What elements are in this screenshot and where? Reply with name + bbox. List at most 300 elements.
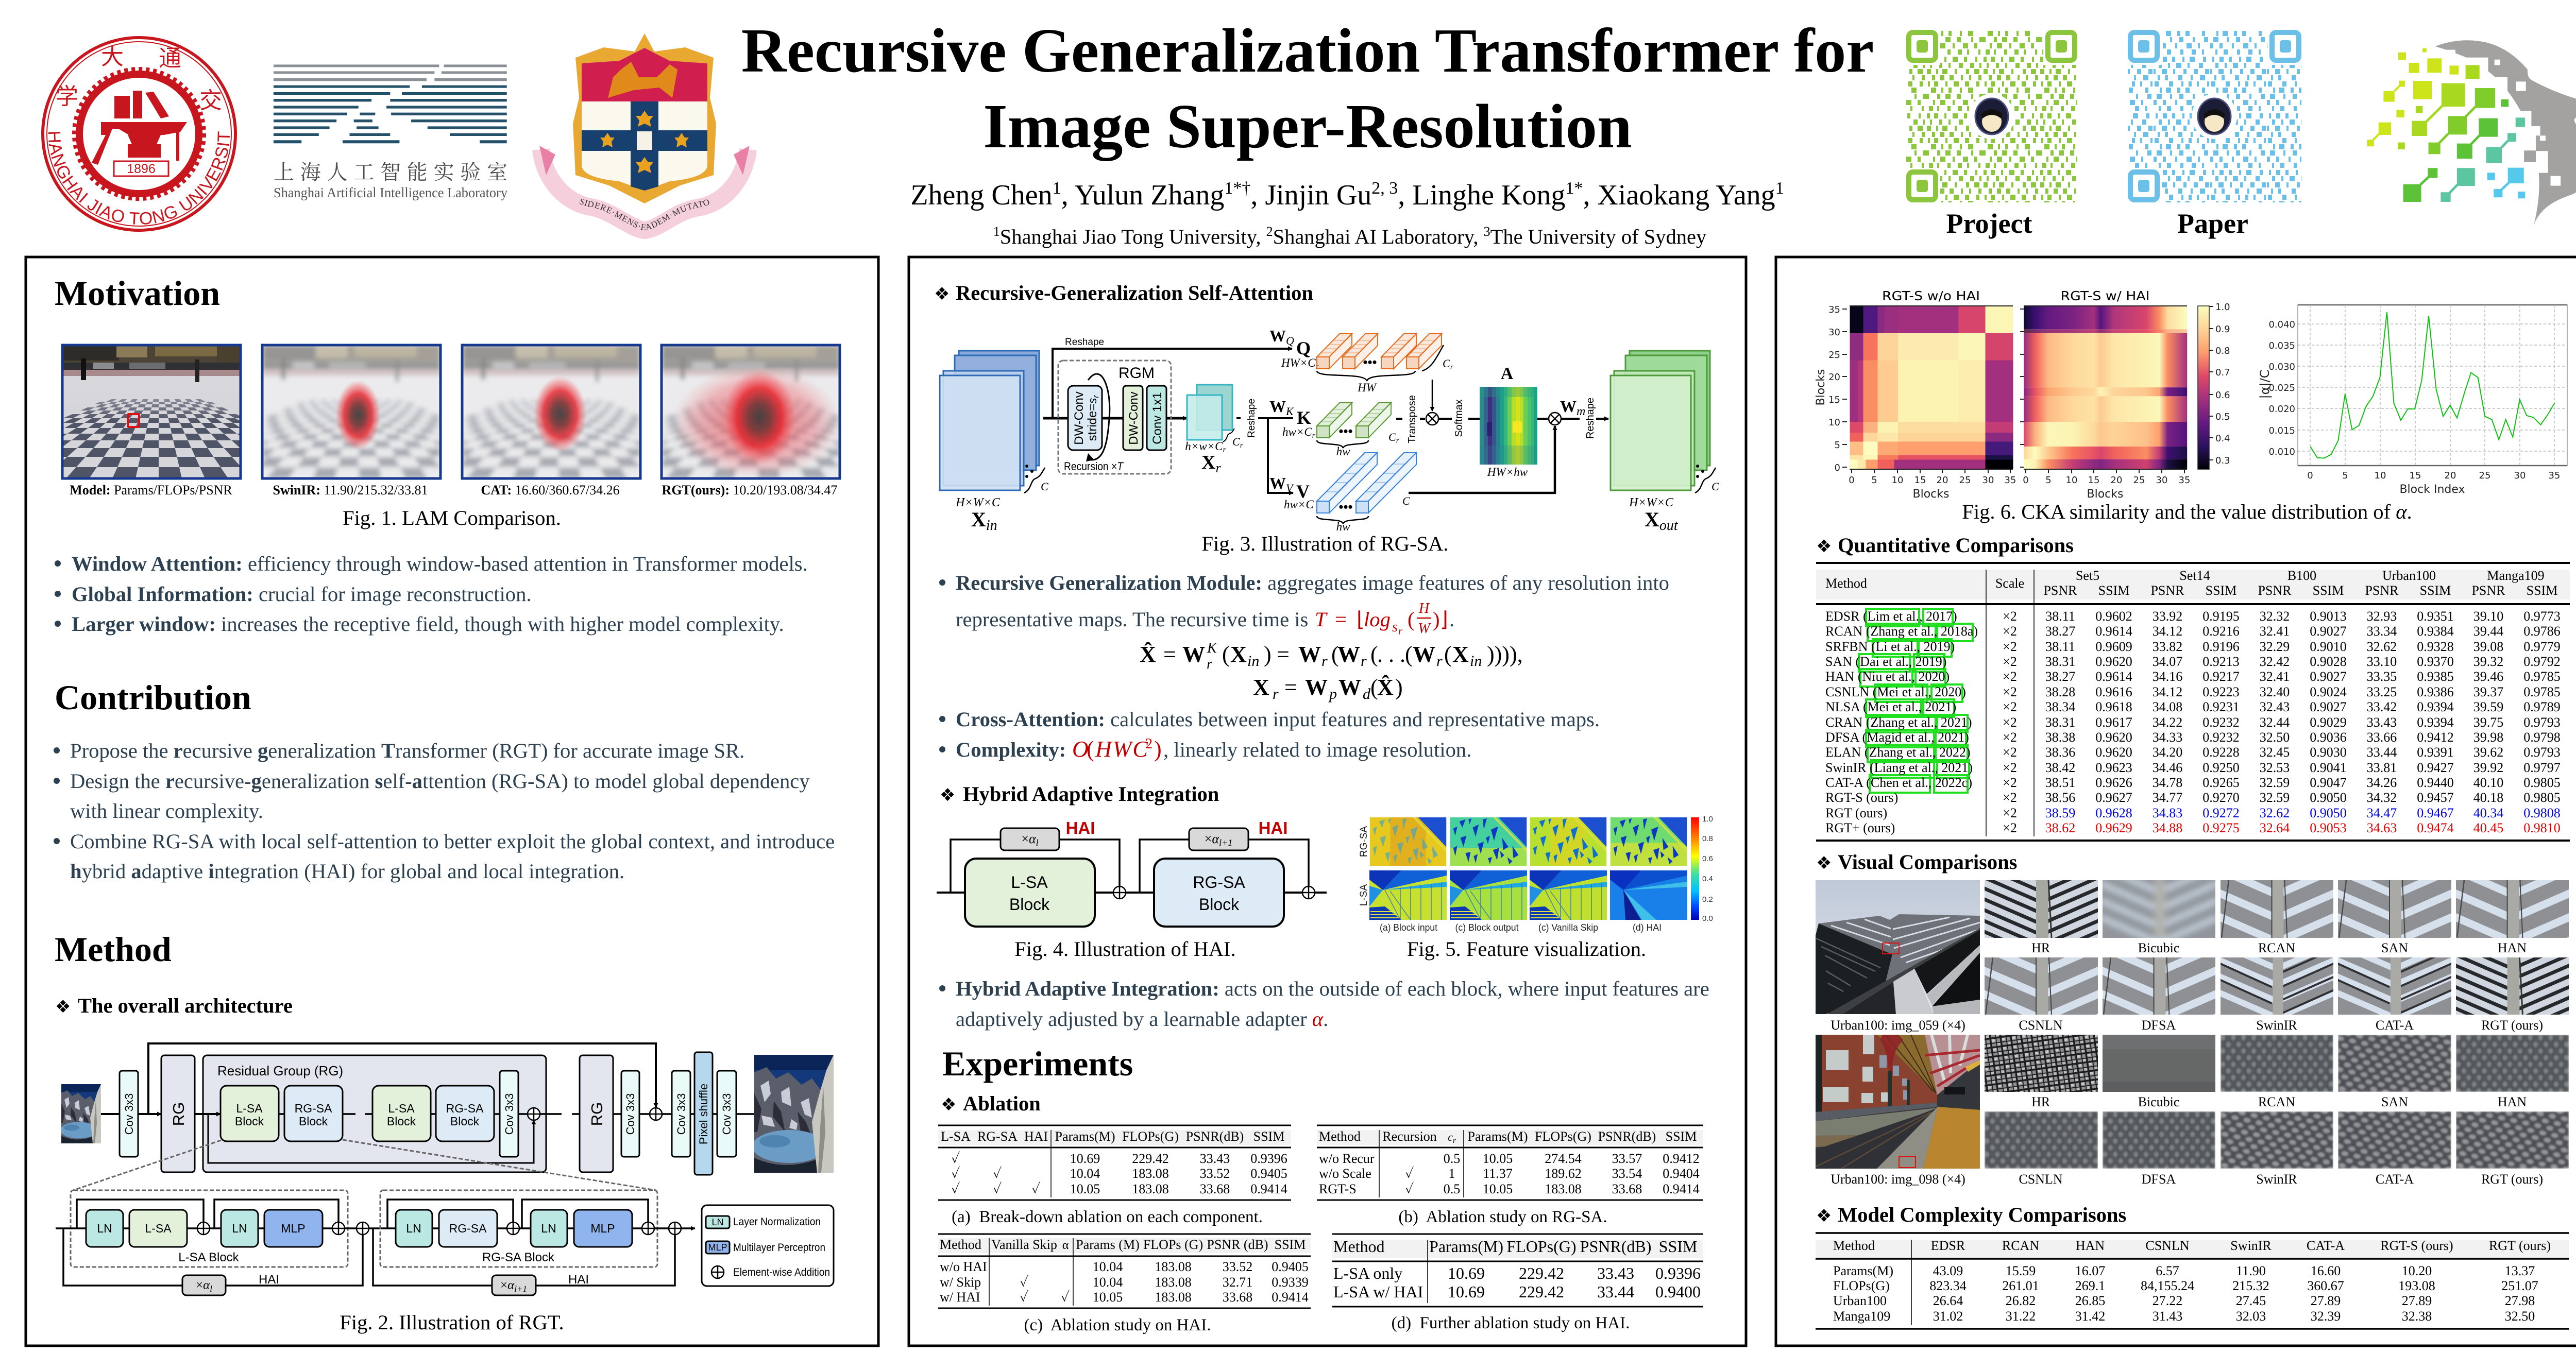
table: (a) break-down ablation: 33.43 <box>1200 1151 1230 1166</box>
table: quantitative comparisons: 0.9195 <box>2202 609 2240 624</box>
table: model complexity: FLOPs(G) <box>1833 1278 1890 1293</box>
equation 2: p <box>1328 686 1337 703</box>
table: quantitative comparisons: 33.10 <box>2367 654 2397 669</box>
affiliations: 2 <box>1266 224 1273 239</box>
RGM module: stride=s <box>1086 398 1099 441</box>
image captions: SwinIR: 11.90/215.32/33.81 <box>273 483 428 498</box>
table: model complexity: EDSR <box>1931 1238 1965 1253</box>
table: quantitative comparisons: 38.51 <box>2045 775 2075 790</box>
chart: CKA heatmap without HAI: Blocks <box>1913 488 1949 501</box>
table: quantitative comparisons: 38.31 <box>2045 654 2075 669</box>
image: RGT LAM <box>526 345 967 479</box>
arrows: main path <box>1043 417 1187 419</box>
K branch: C <box>1388 431 1396 443</box>
figure: feature visualization: 0.2 <box>1702 895 1713 904</box>
K branch: r <box>1312 432 1315 440</box>
connector between groups <box>540 1113 754 1115</box>
table: quantitative comparisons: 32.40 <box>2260 684 2290 699</box>
subheading: Quantitative Comparisons: Quantitative Comparisons <box>1838 534 2074 557</box>
equation 1: X <box>1452 642 1469 667</box>
table: quantitative comparisons: 39.59 <box>2473 699 2503 714</box>
table: model complexity: 31.42 <box>2075 1309 2105 1324</box>
block: Cov 3x3 <box>717 1071 736 1157</box>
bullet: complexity <box>956 736 1471 762</box>
equation 1: K <box>1207 640 1217 656</box>
table: quantitative comparisons: 0.9773 <box>2523 609 2561 624</box>
V branch: V <box>1296 481 1310 502</box>
table: (b) RG-SA ablation: PSNR(dB) <box>1598 1129 1656 1144</box>
detail: RG-SA block <box>380 1190 695 1267</box>
table: (d) further HAI ablation: 10.69 <box>1448 1264 1485 1282</box>
table: quantitative comparisons: 39.75 <box>2473 715 2503 730</box>
table: quantitative comparisons: 34.77 <box>2153 790 2182 805</box>
K branch <box>1269 397 1399 458</box>
table: (b) RG-SA ablation: 183.08 <box>1545 1181 1582 1196</box>
Q branch: Q <box>1296 338 1311 358</box>
table: quantitative comparisons: 32.41 <box>2260 669 2290 684</box>
table: quantitative comparisons: 32.62 <box>2260 806 2290 820</box>
table: quantitative comparisons: 38.62 <box>2045 820 2075 835</box>
table: (d) further HAI ablation: SSIM <box>1659 1237 1697 1256</box>
representative features <box>1185 385 1243 475</box>
subheading: Visual Comparisons: ❖ <box>1816 853 1832 874</box>
figure: feature visualization: 0.6 <box>1702 854 1713 863</box>
panel: right column <box>1776 257 2576 1346</box>
block: RG 2: RG <box>588 1102 606 1126</box>
block: pixel shuffle <box>694 1052 713 1175</box>
table: quantitative comparisons: 0.9616 <box>2095 684 2132 699</box>
table: (a) break-down ablation: L-SA <box>941 1129 971 1144</box>
caption: Fig. 1: Fig. 1. LAM Comparison. <box>343 506 561 529</box>
chart: alpha value line chart <box>2258 305 2567 496</box>
table: quantitative comparisons: EDSR (Lim et al., 2017) <box>1825 609 1957 624</box>
chart: CKA heatmap with HAI: 10 <box>2066 475 2077 486</box>
bullets: RG module: ) <box>1433 608 1440 631</box>
heading: Method: Method <box>55 930 172 969</box>
crop labels row 2: SwinIR <box>2256 1018 2297 1033</box>
table: (a) break-down ablation: 0.9414 <box>1250 1181 1287 1196</box>
table: quantitative comparisons: NLSA (Mei et al., 2021) <box>1825 699 1956 714</box>
block: Cov 3x3 <box>120 1071 138 1157</box>
table: quantitative comparisons: 0.9351 <box>2417 609 2454 624</box>
bullet: complexity: , linearly related to image resolution. <box>1163 738 1471 761</box>
table: quantitative comparisons: 0.9440 <box>2417 775 2454 790</box>
table: quantitative comparisons: 32.44 <box>2260 715 2290 730</box>
table: quantitative comparisons: 0.9231 <box>2202 699 2240 714</box>
figure: feature visualization: (d) HAI <box>1633 922 1662 933</box>
HAI skip paths: ×α <box>500 1278 514 1292</box>
image: SwinIR LAM <box>127 345 567 478</box>
chart: CKA heatmap with HAI <box>2020 288 2190 501</box>
diagram: HAI: ×α <box>1205 831 1219 846</box>
table: quantitative comparisons: ×2 <box>2003 820 2017 835</box>
equation 1: r <box>1207 656 1212 672</box>
table: quantitative comparisons: RGT+ (ours) <box>1825 820 1895 835</box>
table: (a) break-down ablation: Params(M) <box>1055 1129 1115 1144</box>
table: quantitative comparisons: 39.44 <box>2473 624 2503 639</box>
table: quantitative comparisons: 0.9027 <box>2310 699 2347 714</box>
figure: feature visualization <box>1359 815 1713 933</box>
crop labels row 1: HR <box>2031 940 2050 955</box>
table: quantitative comparisons: SwinIR (Liang et al., 2021) <box>1825 760 1973 775</box>
transpose and softmax labels: Reshape <box>1585 398 1596 439</box>
Q branch: Q <box>1286 334 1294 347</box>
label: W_m: m <box>1577 405 1585 418</box>
table: model complexity: 84,155.24 <box>2141 1278 2194 1293</box>
authors: , Yulun Zhang <box>1061 179 1224 211</box>
motivation bullets <box>55 552 808 636</box>
chart: alpha value line chart: 15 <box>2410 470 2421 481</box>
table: model complexity: 10.20 <box>2402 1263 2432 1278</box>
table: (a) break-down ablation: 33.52 <box>1200 1166 1230 1181</box>
output feature stack: H×W×C <box>1629 496 1674 509</box>
output feature stack: X <box>1645 508 1659 531</box>
table: (b) RG-SA ablation: SSIM <box>1666 1129 1697 1144</box>
chart: CKA heatmap with HAI: 30 <box>2156 475 2167 486</box>
diagram: HAI: RG-SA <box>1193 873 1245 892</box>
table: (d) further HAI ablation: Params(M) <box>1429 1237 1503 1256</box>
table: quantitative comparisons: SAN (Dai et al., 2019) <box>1825 654 1946 669</box>
authors: 1 <box>1053 179 1061 198</box>
table: (b) RG-SA ablation: 33.57 <box>1612 1151 1642 1166</box>
bullets: RG module: s <box>1392 619 1398 635</box>
authors: 1* <box>1565 179 1583 198</box>
table: model complexity: 32.39 <box>2311 1309 2341 1324</box>
flow lines <box>1053 349 1292 418</box>
equation 1: ( <box>1370 642 1378 667</box>
subheading: Quantitative Comparisons: ❖ <box>1816 536 1832 557</box>
bullets: RG module: T <box>1315 608 1328 631</box>
crop labels row 1: HAN <box>2498 940 2527 955</box>
attention map A <box>1480 364 1537 478</box>
transpose and softmax labels: Transpose <box>1406 395 1418 443</box>
chart: CKA heatmap without HAI: 25 <box>1959 475 1971 486</box>
legend: Multilayer Perceptron <box>733 1242 825 1254</box>
diagram: RG-SA <box>940 327 1719 534</box>
equation 2: r <box>1273 686 1279 703</box>
table: model complexity: 13.37 <box>2505 1263 2535 1278</box>
Q branch <box>1269 327 1453 394</box>
table: quantitative comparisons: 38.38 <box>2045 730 2075 745</box>
table: quantitative comparisons: 34.08 <box>2153 699 2182 714</box>
detail: RG-SA block: MLP <box>590 1222 615 1235</box>
table: (c) HAI ablation: SSIM <box>1275 1237 1306 1252</box>
table: model complexity: 27.89 <box>2402 1293 2432 1308</box>
bullet: complexity: ( <box>1087 737 1094 762</box>
table: quantitative comparisons: 0.9036 <box>2310 730 2347 745</box>
chart: alpha value line chart: 5 <box>2342 470 2348 481</box>
table: quantitative comparisons: 34.16 <box>2153 669 2182 684</box>
table: quantitative comparisons: 32.50 <box>2260 730 2290 745</box>
attention map A: HW×hw <box>1487 466 1528 478</box>
subheading: HAI: ❖ <box>940 785 955 806</box>
QR label: Project: Project <box>1946 208 2032 239</box>
table: (d) further HAI ablation: 33.44 <box>1597 1282 1634 1301</box>
table: quantitative comparisons: 0.9328 <box>2417 639 2454 654</box>
diagram: HAI: HAI <box>1259 818 1287 837</box>
table: model complexity: CAT-A <box>2307 1238 2345 1253</box>
image: input scene <box>0 345 367 478</box>
authors: 1*† <box>1224 179 1250 198</box>
table: quantitative comparisons: 0.9050 <box>2310 790 2347 805</box>
table: quantitative comparisons: 0.9394 <box>2417 699 2454 714</box>
table: model complexity: SwinIR <box>2230 1238 2272 1253</box>
photo: building <box>1816 880 1980 1014</box>
Q branch: r <box>1316 363 1319 371</box>
chart: CKA heatmap with HAI: Blocks <box>2087 488 2123 501</box>
subheading: RG-SA: Recursive-Generalization Self-Attention <box>956 281 1313 304</box>
chart: alpha value line chart: |α|/C <box>2258 370 2272 399</box>
crop labels row 4: CSNLN <box>2019 1172 2063 1187</box>
block: pixel shuffle: Pixel shuffle <box>697 1084 710 1144</box>
table: quantitative comparisons: 0.9457 <box>2417 790 2454 805</box>
figure: feature visualization: 0.4 <box>1702 875 1713 883</box>
crop labels row 2: CSNLN <box>2019 1018 2063 1033</box>
table: quantitative comparisons: 0.9620 <box>2095 730 2132 745</box>
table: quantitative comparisons: PSNR <box>2365 583 2399 598</box>
table: (c) HAI ablation: Vanilla Skip <box>991 1237 1057 1252</box>
table: (a) break-down ablation: ✓ <box>993 1181 1002 1196</box>
table: (a) break-down ablation: FLOPs(G) <box>1122 1129 1179 1144</box>
table: quantitative comparisons: B100 <box>2287 568 2316 583</box>
equation 2: d <box>1363 686 1371 703</box>
table: model complexity: 261.01 <box>2002 1278 2039 1293</box>
table: quantitative comparisons: ×2 <box>2003 609 2017 624</box>
equation 1: in <box>1470 653 1482 670</box>
table: quantitative comparisons: 0.9810 <box>2523 820 2561 835</box>
table: quantitative comparisons: 0.9384 <box>2417 624 2454 639</box>
table: (c) HAI ablation: 0.9405 <box>1272 1259 1309 1274</box>
table: model complexity: 215.32 <box>2232 1278 2269 1293</box>
table: quantitative comparisons: 0.9614 <box>2095 669 2132 684</box>
table: quantitative comparisons: 0.9617 <box>2095 715 2132 730</box>
V branch <box>1269 453 1416 533</box>
table: quantitative comparisons: 0.9265 <box>2202 775 2240 790</box>
bullets: RG module: representative maps. The recursive time is <box>956 608 1308 631</box>
table: quantitative comparisons: 40.34 <box>2473 806 2503 820</box>
table: model complexity: 32.38 <box>2402 1309 2432 1324</box>
table: quantitative comparisons: 34.33 <box>2153 730 2182 745</box>
table: (b) RG-SA ablation: 10.05 <box>1483 1151 1513 1166</box>
contribution bullets: Propose the recursive generalization Transformer (RGT) for accurate image SR. <box>70 739 744 762</box>
table: quantitative comparisons: 0.9270 <box>2202 790 2240 805</box>
table: quantitative comparisons: 0.9275 <box>2202 820 2240 835</box>
table: quantitative comparisons: Scale <box>1995 576 2024 591</box>
QR code: Paper <box>2128 30 2301 202</box>
table: model complexity: 251.07 <box>2501 1278 2538 1293</box>
equation 2: W <box>1305 675 1328 700</box>
table: quantitative comparisons: 34.78 <box>2153 775 2182 790</box>
table: quantitative comparisons: 0.9228 <box>2202 745 2240 760</box>
crop labels row 1 <box>2031 940 2527 955</box>
table: quantitative comparisons: 38.27 <box>2045 669 2075 684</box>
contribution bullets <box>54 739 835 883</box>
table: model complexity: 32.03 <box>2236 1309 2266 1324</box>
chart: CKA heatmap without HAI: 30 <box>1982 475 1994 486</box>
equation 2: ( <box>1370 675 1378 700</box>
image captions: Model: Params/FLOPs/PSNR <box>70 483 232 498</box>
caption: table d: (d) Further ablation study on HAI. <box>1392 1314 1630 1332</box>
table: quantitative comparisons: 0.9029 <box>2310 715 2347 730</box>
image captions: RGT(ours): 10.20/193.08/34.47 <box>662 483 837 498</box>
panel: middle column <box>909 257 1746 1346</box>
logo: Shanghai AI Laboratory <box>274 64 507 200</box>
image captions <box>70 483 837 498</box>
table: quantitative comparisons: 38.11 <box>2045 609 2075 624</box>
chart: CKA heatmap without HAI: RGT-S w/o HAI <box>1882 288 1980 303</box>
table: quantitative comparisons: 34.47 <box>2367 806 2397 820</box>
table: (b) RG-SA ablation: 0.9404 <box>1663 1166 1700 1181</box>
table: quantitative comparisons: 33.82 <box>2153 639 2182 654</box>
bullets: RG module: log <box>1364 608 1391 631</box>
table: quantitative comparisons: 39.98 <box>2473 730 2503 745</box>
table: model complexity: 26.85 <box>2075 1293 2105 1308</box>
diagram: HAI: HAI <box>1066 818 1095 837</box>
table: quantitative comparisons: 0.9474 <box>2417 820 2454 835</box>
contribution bullets: with linear complexity. <box>70 799 263 823</box>
table: (a) break-down ablation <box>938 1125 1291 1200</box>
chart: CKA heatmap without HAI: 5 <box>1871 475 1877 486</box>
table: (a) break-down ablation: 229.42 <box>1132 1151 1169 1166</box>
detail: RG-SA block: RG-SA Block <box>482 1251 555 1264</box>
table: (c) HAI ablation: 183.08 <box>1155 1275 1192 1290</box>
Q branch: HW <box>1357 381 1377 394</box>
table: quantitative comparisons: 0.9027 <box>2310 624 2347 639</box>
table: (d) further HAI ablation: 33.43 <box>1597 1264 1634 1282</box>
header <box>41 16 2576 248</box>
table: quantitative comparisons: RGT (ours) <box>1825 806 1887 820</box>
table: (c) HAI ablation: 0.9339 <box>1272 1275 1309 1290</box>
table: model complexity: Manga109 <box>1833 1309 1890 1324</box>
table: (d) further HAI ablation: L-SA w/ HAI <box>1333 1282 1423 1301</box>
equation 1: in <box>1247 653 1259 670</box>
bullets: RG module: = <box>1335 608 1347 631</box>
table: quantitative comparisons: SSIM <box>2420 583 2451 598</box>
residual group: Block <box>450 1115 480 1128</box>
table: quantitative comparisons: ×2 <box>2003 806 2017 820</box>
RGM module: Recursion ×T <box>1064 460 1124 473</box>
logo: Shanghai Jiao Tong University: 大 <box>101 38 124 71</box>
bullets: RG module: H <box>1418 601 1430 616</box>
affiliations: 3 <box>1484 224 1490 239</box>
V branch: ••• <box>1338 500 1353 515</box>
chart: CKA heatmap without HAI: 5 <box>1835 440 1840 451</box>
chart: CKA heatmap without HAI: 30 <box>1828 327 1840 338</box>
table: (b) RG-SA ablation: 10.05 <box>1483 1181 1513 1196</box>
equation 1: ( <box>1444 642 1452 667</box>
residual group: Residual Group (RG) <box>217 1063 343 1078</box>
equation 1: W <box>1413 642 1435 667</box>
table: quantitative comparisons: 0.9793 <box>2523 745 2561 760</box>
table: model complexity: RGT-S (ours) <box>2380 1238 2453 1253</box>
table: (c) HAI ablation: w/ Skip <box>940 1275 981 1290</box>
table: (b) RG-SA ablation: 0.9412 <box>1663 1151 1700 1166</box>
table: (b) RG-SA ablation: 0.5 <box>1444 1181 1460 1196</box>
table: quantitative comparisons: SSIM <box>2098 583 2129 598</box>
chart: alpha value line chart: 25 <box>2479 470 2490 481</box>
table: quantitative comparisons: 0.9602 <box>2095 609 2132 624</box>
table: (b) RG-SA ablation: RGT-S <box>1319 1181 1357 1196</box>
table: quantitative comparisons: 34.07 <box>2153 654 2182 669</box>
table: (d) further HAI ablation: FLOPs(G) <box>1506 1237 1577 1256</box>
table: quantitative comparisons: 0.9779 <box>2523 639 2561 654</box>
chart: CKA heatmap without HAI: 0 <box>1835 463 1840 473</box>
transpose and softmax labels: Softmax <box>1453 399 1465 437</box>
table: quantitative comparisons: 0.9620 <box>2095 745 2132 760</box>
table: quantitative comparisons: ELAN (Zhang et al., 2022) <box>1825 745 1971 760</box>
chart: CKA heatmap with HAI: 15 <box>2088 475 2099 486</box>
detail: L-SA block: L-SA Block <box>178 1251 240 1264</box>
table: quantitative comparisons: 0.9786 <box>2523 624 2561 639</box>
residual group: Block <box>235 1115 264 1128</box>
authors: 1 <box>1775 179 1784 198</box>
table: quantitative comparisons: 0.9618 <box>2095 699 2132 714</box>
table: (c) HAI ablation: 10.04 <box>1093 1275 1123 1290</box>
table: quantitative comparisons: 34.12 <box>2153 684 2182 699</box>
table: (d) further HAI ablation <box>1332 1234 1703 1307</box>
table: (c) HAI ablation: ✓ <box>1061 1290 1070 1305</box>
bullet: HAI: Hybrid Adaptive Integration: acts on the outside of each block, where input features are <box>956 977 1709 1000</box>
table: quantitative comparisons: 34.63 <box>2367 820 2397 835</box>
logo: Shanghai Jiao Tong University: 交 <box>199 82 222 115</box>
colorbar: 0.4 <box>2215 433 2230 444</box>
bullets: RG module: Recursive Generalization Module: aggregates image features of any resolution into <box>956 571 1669 594</box>
V branch: W <box>1269 474 1286 492</box>
table: quantitative comparisons: ×2 <box>2003 760 2017 775</box>
table: quantitative comparisons: 32.43 <box>2260 699 2290 714</box>
table: (a) break-down ablation: 0.9405 <box>1250 1166 1287 1181</box>
table: (a) break-down ablation: ✓ <box>952 1151 960 1166</box>
diagram: HAI: L-SA <box>1011 873 1048 892</box>
equation 2: W <box>1338 675 1361 700</box>
table: quantitative comparisons: 32.32 <box>2260 609 2290 624</box>
figure: feature visualization: 0.0 <box>1702 914 1713 923</box>
crop labels row 4: CAT-A <box>2376 1172 2414 1187</box>
Q branch: HW×C <box>1281 356 1316 369</box>
figure: visual comparison img_098 <box>1816 1035 2569 1187</box>
K branch: r <box>1396 437 1399 445</box>
table: quantitative comparisons: 0.9013 <box>2310 609 2347 624</box>
image: CAT LAM <box>327 345 767 478</box>
equation 1: ( <box>1405 642 1413 667</box>
table: (c) HAI ablation: α <box>1062 1239 1069 1252</box>
equation 1: = <box>1277 642 1290 667</box>
table: quantitative comparisons: 0.9412 <box>2417 730 2454 745</box>
chart: alpha value line chart: 0.025 <box>2268 383 2295 393</box>
K branch: hw×C <box>1282 425 1312 438</box>
affiliations: Shanghai AI Laboratory, <box>1273 225 1484 248</box>
table: quantitative comparisons: PSNR <box>2043 583 2077 598</box>
label: reshape top: Reshape <box>1065 337 1104 348</box>
table: quantitative comparisons: 0.9050 <box>2310 806 2347 820</box>
table: quantitative comparisons: 0.9010 <box>2310 639 2347 654</box>
table: quantitative comparisons: 0.9370 <box>2417 654 2454 669</box>
QR label: Paper: Paper <box>2177 208 2248 239</box>
input feature stack: in <box>986 518 997 534</box>
motivation bullets: Window Attention: efficiency through window-based attention in Transformer models. <box>72 552 808 575</box>
figure: feature visualization: 1.0 <box>1702 815 1713 824</box>
table: model complexity: 27.98 <box>2505 1293 2535 1308</box>
image captions: CAT: 16.60/360.67/34.26 <box>481 483 620 498</box>
table: (c) HAI ablation: ✓ <box>1020 1275 1029 1290</box>
table: quantitative comparisons: 40.45 <box>2473 820 2503 835</box>
table: (c) HAI ablation: 33.68 <box>1223 1290 1252 1305</box>
addition node <box>650 1108 662 1120</box>
chart: CKA heatmap without HAI: 35 <box>2005 475 2016 486</box>
crop labels row 1: RCAN <box>2258 940 2295 955</box>
table: quantitative comparisons: 0.9394 <box>2417 715 2454 730</box>
legend: MLP <box>708 1242 727 1253</box>
